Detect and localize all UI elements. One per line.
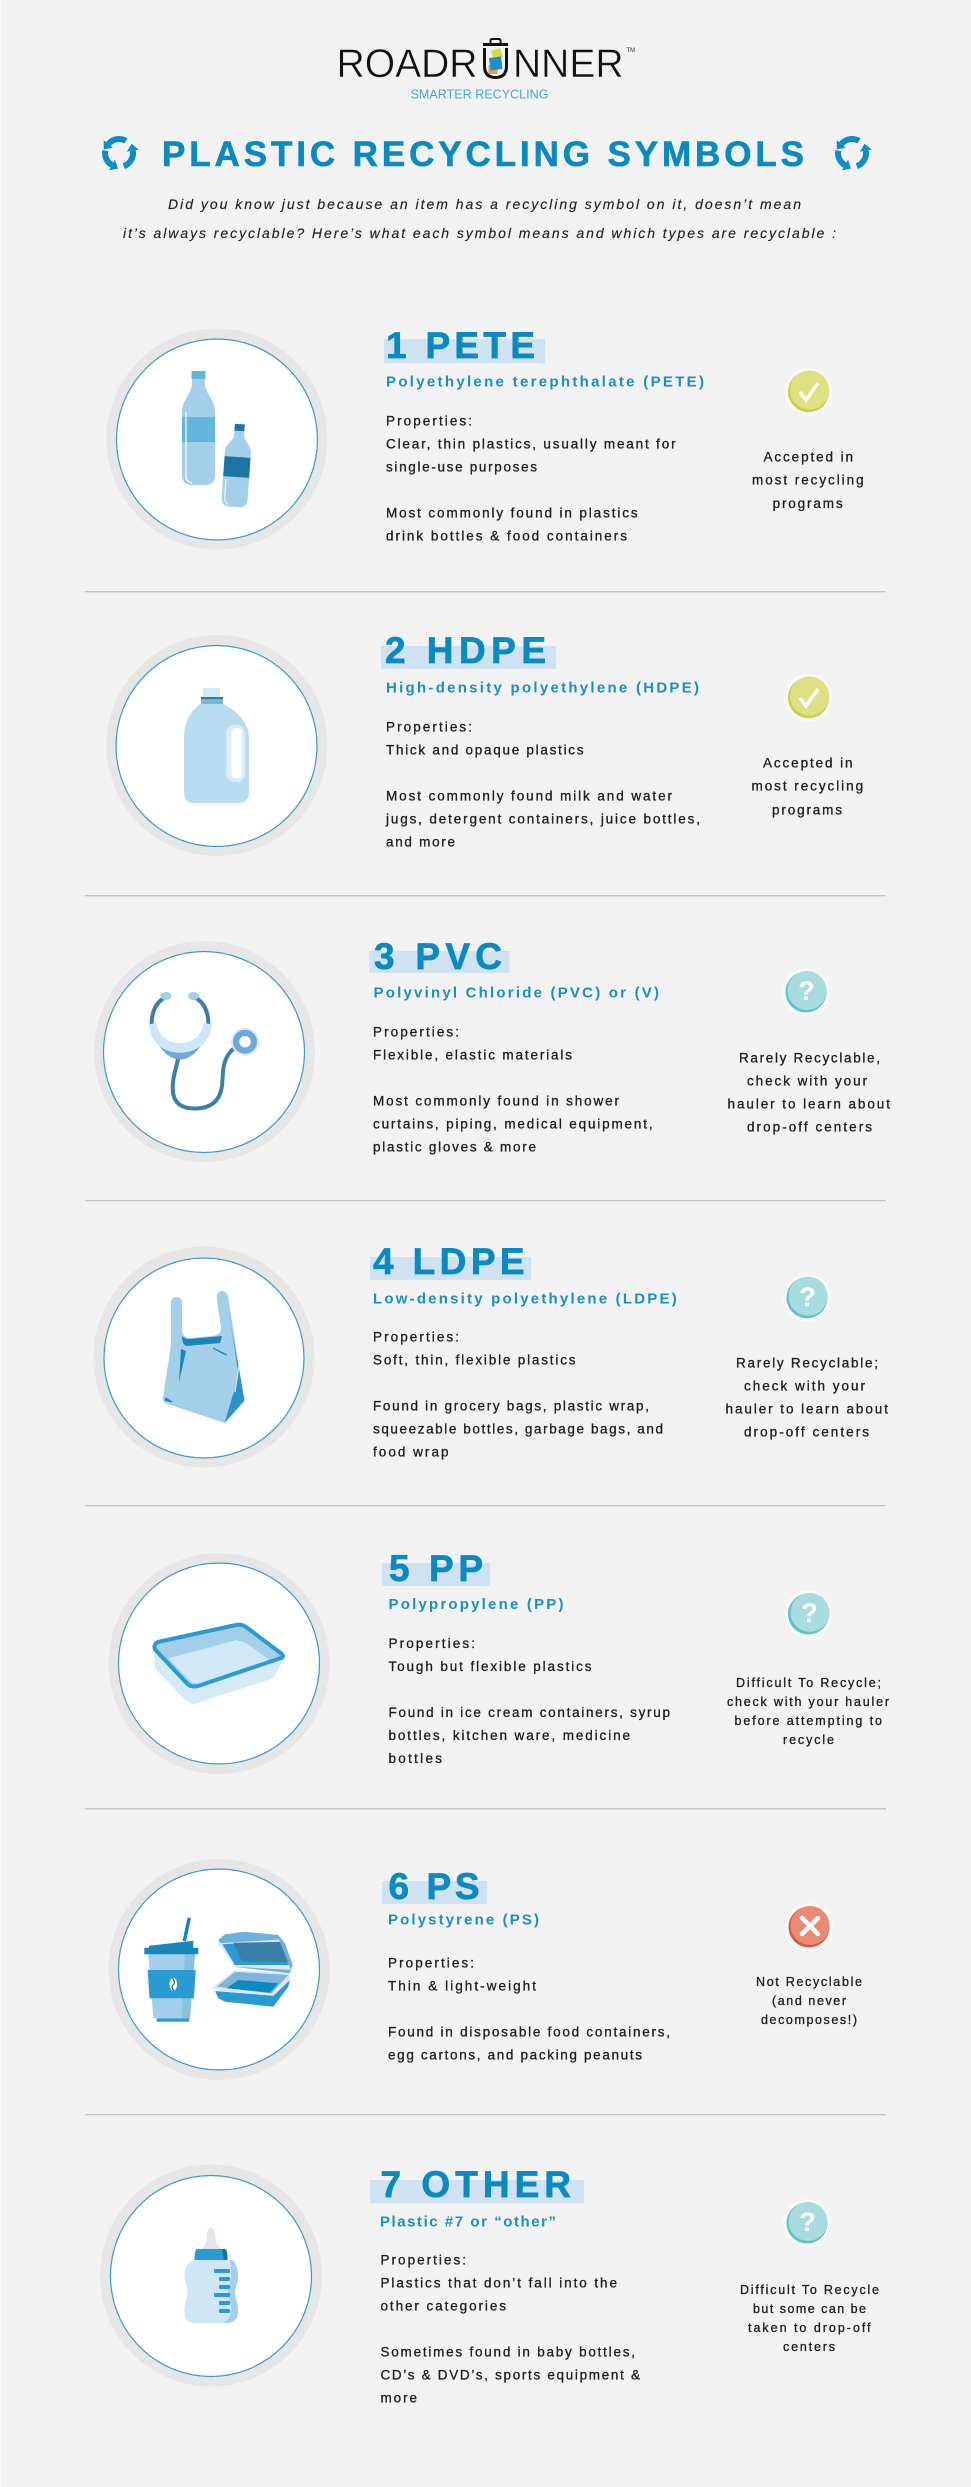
properties text: squeezable bottles, garbage bags, and xyxy=(373,1422,663,1436)
properties text xyxy=(386,414,676,544)
properties text xyxy=(373,1024,653,1154)
properties text: Most commonly found milk and water xyxy=(386,788,672,804)
properties text: CD’s & DVD’s, sports equipment & xyxy=(380,2368,640,2382)
intro text: Did you know just because an item has a recycling symbol on it, doesn’t mean xyxy=(168,196,801,212)
heading: 6 PS: 6 PS xyxy=(388,1866,480,1907)
properties text: Plastics that don’t fall into the xyxy=(380,2276,617,2290)
properties text xyxy=(380,2252,640,2406)
logo: RoadRunner Smarter Recycling: TM xyxy=(626,48,635,54)
icon: check badge xyxy=(784,674,832,722)
properties text: Properties: xyxy=(388,1956,474,1970)
status text xyxy=(728,1050,890,1134)
status text: Rarely Recyclable; xyxy=(736,1356,878,1370)
properties text xyxy=(388,1636,670,1766)
heading: 2 HDPE: 2 HDPE xyxy=(385,630,546,671)
status text: but some can be xyxy=(753,2302,866,2316)
icon: baby bottle xyxy=(100,2164,322,2386)
icon: recycling arrows left xyxy=(104,139,139,170)
properties text: Tough but flexible plastics xyxy=(388,1659,592,1674)
properties text: jugs, detergent containers, juice bottles, xyxy=(385,812,700,826)
properties text: egg cartons, and packing peanuts xyxy=(388,2048,642,2062)
properties text: food wrap xyxy=(373,1444,448,1460)
status text xyxy=(752,450,864,511)
subheading: Polystyrene (PS) xyxy=(388,1912,539,1928)
status text: Difficult To Recycle xyxy=(740,2283,879,2297)
status text: hauler to learn about xyxy=(728,1096,890,1112)
properties text: Properties: xyxy=(373,1024,459,1040)
properties text: bottles, kitchen ware, medicine xyxy=(388,1728,630,1743)
properties text xyxy=(373,1330,663,1460)
status text: Rarely Recyclable, xyxy=(739,1050,880,1066)
status text: drop-off centers xyxy=(747,1120,872,1134)
status text: recycle xyxy=(783,1733,834,1747)
heading: 1 PETE: 1 PETE xyxy=(386,325,535,366)
icon: stethoscope xyxy=(94,941,315,1162)
icon: recycling arrows right xyxy=(837,139,872,170)
status text xyxy=(727,1676,889,1747)
properties text: Found in grocery bags, plastic wrap, xyxy=(373,1398,649,1414)
properties text: Properties: xyxy=(373,1330,459,1344)
icon: question badge: ? xyxy=(801,1598,818,1628)
status text: check with your hauler xyxy=(727,1695,889,1709)
properties text: Found in ice cream containers, syrup xyxy=(388,1705,670,1720)
status text: hauler to learn about xyxy=(726,1402,888,1416)
properties text xyxy=(388,1956,670,2062)
status text xyxy=(756,1975,862,2027)
icon: question badge xyxy=(783,2199,831,2247)
status text: (and never xyxy=(772,1994,846,2008)
status text: programs xyxy=(772,802,842,818)
properties text: drink bottles & food containers xyxy=(386,528,627,544)
subheading: Polyvinyl Chloride (PVC) or (V) xyxy=(374,984,659,1002)
icon: question badge: ? xyxy=(798,976,815,1006)
panel: 6 PS xyxy=(108,1859,862,2080)
status text: Accepted in xyxy=(763,756,852,770)
logo: RoadRunner Smarter Recycling xyxy=(336,39,635,102)
properties text: Found in disposable food containers, xyxy=(388,2024,670,2040)
subheading: Low-density polyethylene (LDPE) xyxy=(373,1290,677,1308)
icon: cross badge xyxy=(785,1903,833,1951)
heading: 3 PVC: 3 PVC xyxy=(374,936,502,977)
status text: Difficult To Recycle; xyxy=(736,1676,881,1690)
panel: 3 PVC xyxy=(94,936,890,1162)
properties text: more xyxy=(380,2390,417,2406)
properties text: curtains, piping, medical equipment, xyxy=(373,1116,653,1132)
panel: 1 PETE xyxy=(106,325,864,550)
status text: taken to drop-off xyxy=(748,2321,871,2335)
status text: check with your xyxy=(744,1378,866,1394)
properties text: Properties: xyxy=(386,720,472,734)
status text: most recycling xyxy=(752,472,864,488)
properties text: Flexible, elastic materials xyxy=(373,1048,572,1062)
properties text: Thick and opaque plastics xyxy=(386,742,584,758)
panel: 4 LDPE xyxy=(94,1241,888,1468)
properties text xyxy=(385,720,700,850)
subheading: Plastic #7 or “other” xyxy=(380,2214,556,2230)
heading: 5 PP: 5 PP xyxy=(389,1548,483,1589)
properties text: Most commonly found in shower xyxy=(373,1094,620,1108)
logo: RoadRunner Smarter Recycling: ROADR xyxy=(336,42,478,86)
heading: 7 OTHER: 7 OTHER xyxy=(380,2164,571,2205)
properties text: plastic gloves & more xyxy=(373,1140,536,1154)
properties text: Properties: xyxy=(386,414,472,428)
logo: RoadRunner Smarter Recycling: SMARTER RECYCLING xyxy=(410,86,548,102)
heading: 4 LDPE: 4 LDPE xyxy=(373,1241,525,1282)
properties text: Properties: xyxy=(388,1636,475,1651)
status text: programs xyxy=(773,496,843,511)
status text: decomposes!) xyxy=(761,2013,857,2027)
status text: Not Recyclable xyxy=(756,1975,862,1989)
icon: check badge xyxy=(784,368,832,416)
icon: question badge: ? xyxy=(799,1282,816,1312)
title: PLASTIC RECYCLING SYMBOLS xyxy=(162,135,804,174)
properties text: and more xyxy=(386,834,455,850)
properties text: Most commonly found in plastics xyxy=(386,506,638,520)
subheading: Polypropylene (PP) xyxy=(388,1596,564,1613)
intro text: it’s always recyclable? Here’s what each symbol means and which types are recyclable : xyxy=(123,225,836,241)
status text: Accepted in xyxy=(764,450,853,464)
status text: drop-off centers xyxy=(744,1424,869,1440)
panel: 5 PP xyxy=(108,1548,889,1774)
subheading: High-density polyethylene (HDPE) xyxy=(386,680,699,696)
status text xyxy=(726,1356,888,1440)
properties text: single-use purposes xyxy=(386,460,537,474)
properties text: Sometimes found in baby bottles, xyxy=(380,2344,635,2360)
status text: most recycling xyxy=(752,778,863,794)
icon: cup and food container xyxy=(108,1859,330,2080)
status text: before attempting to xyxy=(734,1714,882,1728)
icon: question badge xyxy=(783,1274,831,1322)
status text xyxy=(752,756,863,818)
properties text: other categories xyxy=(380,2298,506,2314)
icon: plastic bottles xyxy=(106,328,328,550)
properties text: bottles xyxy=(388,1751,442,1766)
properties text: Soft, thin, flexible plastics xyxy=(373,1352,576,1368)
panel: 7 OTHER xyxy=(100,2164,879,2406)
properties text: Thin & light-weight xyxy=(388,1978,536,1994)
icon: question badge xyxy=(782,968,830,1016)
subheading: Polyethylene terephthalate (PETE) xyxy=(386,374,704,390)
status text xyxy=(740,2283,879,2354)
icon: question badge xyxy=(784,1590,832,1638)
status text: centers xyxy=(783,2340,835,2354)
icon: question badge: ? xyxy=(799,2207,816,2237)
logo: RoadRunner Smarter Recycling: NNER xyxy=(513,42,624,86)
status text: check with your xyxy=(747,1074,868,1088)
properties text: Properties: xyxy=(380,2252,466,2268)
properties text: Clear, thin plastics, usually meant for xyxy=(386,436,676,452)
intro text xyxy=(123,196,836,241)
icon: plastic jug xyxy=(106,635,328,856)
panel: 2 HDPE xyxy=(106,630,863,856)
icon: plastic bag xyxy=(94,1246,314,1468)
icon: plastic tray xyxy=(108,1553,330,1774)
